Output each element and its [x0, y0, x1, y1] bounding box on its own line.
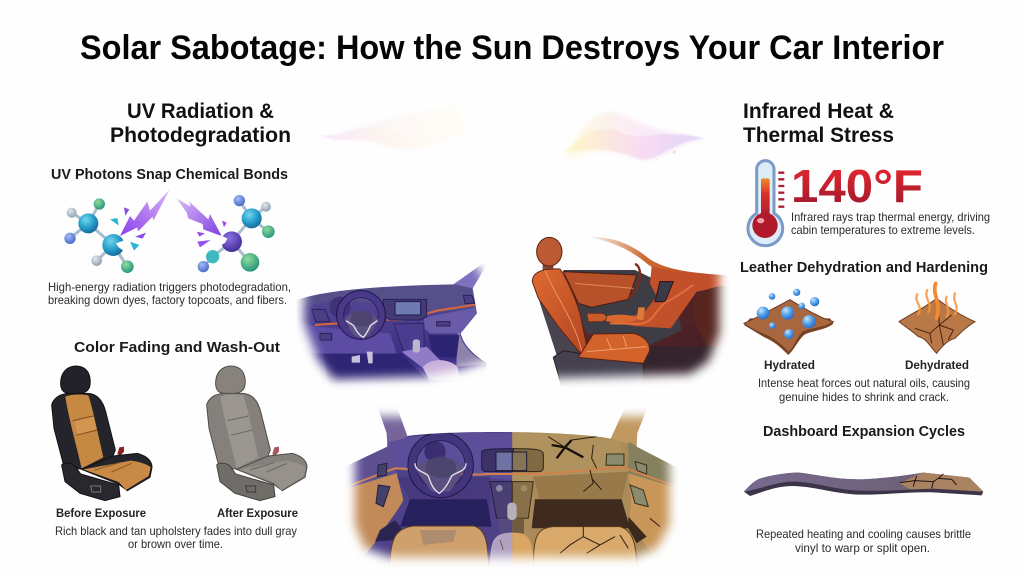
body text: dashboard: vinyl to warp or split open.: [795, 542, 930, 555]
sub-heading: dashboard expansion: Dashboard Expansion Cycles: [763, 424, 965, 440]
body text: infrared: [791, 211, 990, 237]
right molecule: [198, 195, 275, 272]
body text: fading: Rich black and tan upholstery fades into dull gray: [55, 525, 297, 538]
section heading: UV radiation: Photodegradation: [110, 124, 291, 147]
icon: seat after exposure: [207, 366, 307, 501]
title: Solar Sabotage: How the Sun Destroys Your Car Interior: [80, 29, 944, 67]
body text: dashboard: Repeated heating and cooling causes brittle: [756, 528, 971, 541]
label: dehydrated: Dehydrated: [905, 358, 969, 372]
body text: photodegradation: breaking down dyes, factory topcoats, and fibers.: [48, 294, 287, 307]
label: before exposure: Before Exposure: [56, 506, 146, 520]
body text: dashboard: [756, 528, 971, 555]
big number: 140F: 140°F: [791, 160, 923, 212]
illustration: orange infrared side cabin: [532, 237, 733, 387]
right lightning: [177, 198, 222, 236]
body text: leather: Intense heat forces out natural oils, causing: [758, 377, 970, 390]
body text: leather: [758, 377, 970, 404]
decorative light wave: UV: [320, 107, 467, 149]
icon: warped dashboard strip: [744, 473, 983, 496]
section heading: infrared heat: Thermal Stress: [743, 124, 894, 147]
body text: infrared: Infrared rays trap thermal energy, driving: [791, 211, 990, 224]
body text: fading: [55, 525, 297, 551]
sub-heading: colour fading: Color Fading and Wash-Out: [74, 340, 280, 356]
section heading: UV radiation: [110, 100, 291, 147]
body text: photodegradation: High-energy radiation triggers photodegradation,: [48, 281, 291, 294]
label: hydrated: Hydrated: [764, 358, 815, 372]
section heading: infrared heat: Infrared Heat &: [743, 100, 894, 123]
body text: fading: or brown over time.: [128, 538, 223, 551]
section heading: UV radiation: UV Radiation &: [127, 100, 274, 123]
icon: molecules with lightning: [64, 190, 275, 273]
icon: hydrated leather: [744, 289, 833, 355]
left lightning: [120, 190, 169, 236]
decorative light wave: infrared: [563, 112, 705, 160]
illustration: split cracked dashboard: [347, 409, 677, 566]
left molecule: [64, 198, 139, 273]
icon: seat before exposure: [52, 366, 152, 501]
sub-heading: leather: Leather Dehydration and Hardening: [740, 260, 988, 276]
body text: photodegradation: [48, 281, 291, 307]
icon: thermometer: [748, 161, 784, 246]
illustration: purple UV dashboard: [297, 264, 487, 387]
body text: leather: genuine hides to shrink and crack.: [779, 391, 949, 404]
icon: dehydrated leather: [899, 283, 975, 353]
body text: infrared: cabin temperatures to extreme levels.: [791, 224, 975, 237]
section heading: infrared heat: [743, 100, 894, 147]
label: after exposure: After Exposure: [217, 506, 298, 520]
sub-heading: UV photons: UV Photons Snap Chemical Bonds: [51, 167, 288, 183]
